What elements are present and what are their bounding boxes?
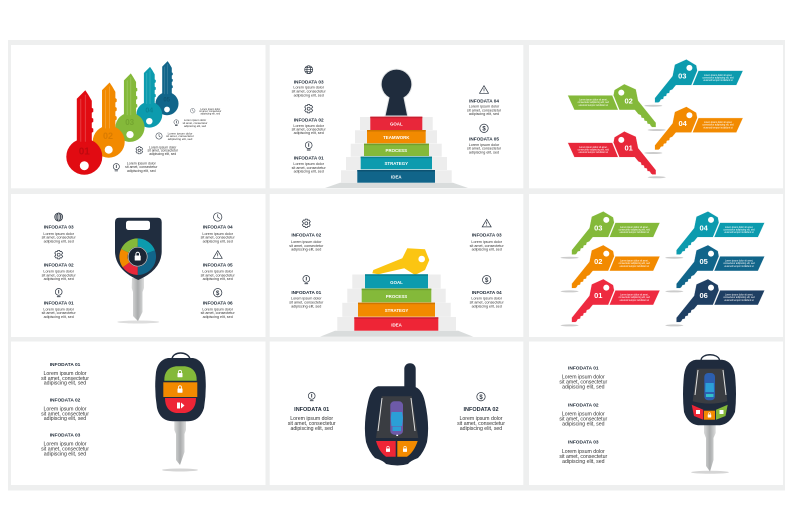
key tag 03	[561, 211, 660, 259]
key tag 01	[568, 131, 666, 178]
key shadow	[691, 471, 729, 474]
key slot	[126, 221, 150, 230]
key tag 03	[644, 59, 743, 107]
info 02: INFODATA 02	[463, 407, 499, 413]
key head	[115, 218, 162, 280]
fob shadow	[162, 468, 198, 472]
key tag 03: Lorem ipsum dolor sit amet,	[704, 74, 733, 77]
key tag 01: Lorem ipsum dolor sit amet,	[579, 146, 608, 149]
info 04: $	[485, 278, 489, 284]
info 03: adipiscing elit, sed	[44, 240, 74, 244]
step teamwork: TEAMWORK	[383, 135, 410, 140]
info 05: adipiscing elit, sed	[469, 150, 499, 154]
key tag 04: 04	[700, 223, 709, 232]
info 03: sit amet, consectetur	[292, 90, 326, 94]
info 05: INFODATA 05	[469, 136, 499, 141]
button orange	[704, 411, 715, 420]
button red	[376, 441, 396, 457]
info 03: INFODATA 03	[294, 79, 324, 84]
info 04: Lorem ipsum dolor	[471, 296, 503, 300]
key tag 03: consectetur adipiscing elit, sed	[702, 76, 734, 79]
step goal: GOAL	[390, 122, 403, 127]
panel: five colored keys	[11, 45, 266, 188]
info 02: sit amet, consectetur	[41, 411, 89, 417]
step goal	[370, 117, 422, 130]
fob blade	[174, 420, 186, 465]
info 05	[201, 251, 235, 281]
info 03: INFODATA 03	[472, 233, 502, 238]
key tag 04: 04	[679, 119, 688, 128]
info 05: $	[482, 126, 486, 132]
caption 04: sit amet, consectetur	[183, 121, 208, 125]
caption 04	[174, 118, 208, 128]
key tag 03: 03	[678, 72, 686, 81]
info 03: sit amet, consectetur	[41, 447, 89, 453]
info 02: sit amet, consectetur	[42, 274, 76, 278]
car	[704, 373, 715, 400]
key 02: 02	[103, 131, 113, 141]
info 03: adipiscing elit, sed	[562, 459, 605, 465]
key tag 05	[665, 245, 765, 292]
caption 02: sit amet, consectetur	[147, 149, 179, 153]
info 02: INFODATA 02	[568, 402, 599, 408]
key tag 05: eiusmod tempor incididunt ut	[724, 265, 754, 268]
info 02: Lorem ipsum dolor	[562, 412, 605, 418]
info 05: sit amet, consectetur	[201, 274, 235, 278]
info 02	[42, 250, 76, 281]
panel: three button fob	[11, 342, 266, 485]
info 04: sit amet, consectetur	[467, 108, 502, 112]
key shadow	[117, 320, 159, 324]
key tag 04: eiusmod tempor incididunt ut	[703, 126, 733, 129]
info 01: INFODATA 01	[291, 290, 322, 295]
info 04: adipiscing elit, sed	[472, 304, 502, 308]
info 02: Lorem ipsum dolor	[460, 416, 503, 422]
info 06: $	[216, 291, 220, 297]
info 01: adipiscing elit, sed	[291, 304, 321, 308]
key tag 02: Lorem ipsum dolor sit amet,	[620, 260, 649, 262]
key tag 02: 02	[625, 96, 633, 105]
caption 02: Lorem ipsum dolor	[149, 146, 177, 150]
fob body	[155, 358, 206, 421]
info 04	[470, 276, 504, 308]
info 04: INFODATA 04	[469, 98, 499, 103]
info 02: sit amet, consectetur	[559, 417, 607, 423]
key tag 04: Lorem ipsum dolor sit amet,	[725, 226, 754, 229]
info 06	[201, 288, 235, 319]
key tag 01	[561, 279, 660, 326]
info 02	[41, 397, 89, 422]
info 01: adipiscing elit, sed	[562, 385, 605, 391]
fob ring	[172, 353, 190, 359]
caption 03	[156, 131, 194, 141]
info 01: Lorem ipsum dolor	[44, 371, 87, 377]
info 01	[288, 392, 336, 432]
info 01: Lorem ipsum dolor	[562, 375, 605, 381]
info 03: adipiscing elit, sed	[294, 94, 324, 98]
key tag 04: consectetur adipiscing elit, sed	[702, 124, 734, 127]
caption 02: adipiscing elit, sed	[149, 152, 176, 156]
info 03	[42, 213, 76, 244]
info 02: INFODATA 02	[291, 233, 322, 238]
info 01: Lorem ipsum dolor	[290, 416, 333, 422]
info 01: adipiscing elit, sed	[294, 170, 324, 174]
info 03: Lorem ipsum dolor	[44, 442, 87, 448]
info 04: INFODATA 04	[472, 290, 502, 295]
info 01: adipiscing elit, sed	[291, 426, 333, 432]
key tag 01: consectetur adipiscing elit, sed	[578, 148, 610, 151]
info 06: INFODATA 06	[203, 300, 233, 305]
key tag 06: consectetur adipiscing elit, sed	[723, 296, 755, 299]
info 02: INFODATA 02	[50, 397, 81, 403]
info 04: adipiscing elit, sed	[203, 240, 233, 244]
step process	[362, 289, 431, 302]
info 01: adipiscing elit, sed	[44, 381, 86, 387]
floor	[325, 183, 468, 188]
info 03: Lorem ipsum dolor	[293, 86, 325, 90]
step goal	[365, 274, 428, 288]
info 06: sit amet, consectetur	[201, 311, 235, 315]
info 06: adipiscing elit, sed	[203, 315, 233, 319]
info 02: sit amet, consectetur	[292, 128, 326, 132]
caption 03: Lorem ipsum dolor	[168, 131, 192, 135]
key tag 06: eiusmod tempor incididunt ut	[724, 299, 754, 302]
key tag 02: eiusmod tempor incididunt ut	[579, 104, 608, 107]
info 02: adipiscing elit, sed	[562, 422, 605, 428]
step strategy: STRATEGY	[385, 308, 408, 313]
step idea: IDEA	[391, 174, 402, 179]
info 05: sit amet, consectetur	[467, 146, 502, 150]
info 02: Lorem ipsum dolor	[43, 270, 75, 274]
step process: PROCESS	[386, 294, 407, 299]
key tag 01: Lorem ipsum dolor sit amet,	[620, 294, 649, 296]
yellow key	[372, 248, 429, 275]
info 03	[41, 433, 89, 457]
caption 05: sit amet, consectetur	[199, 110, 222, 113]
info 05: Lorem ipsum dolor	[202, 270, 234, 274]
key ring	[701, 355, 720, 360]
info 04	[467, 86, 502, 116]
info 02: sit amet, consectetur	[289, 244, 324, 248]
button green	[716, 405, 728, 420]
side stairs	[337, 274, 456, 331]
info 03: adipiscing elit, sed	[472, 248, 502, 252]
info 02: $	[479, 395, 483, 401]
info 01	[289, 276, 324, 308]
keyhole	[381, 69, 412, 116]
info 02	[292, 104, 326, 135]
info 04: adipiscing elit, sed	[469, 112, 499, 116]
caption 03: sit amet, consectetur	[166, 134, 194, 138]
step idea	[357, 170, 435, 183]
caption 05: Lorem ipsum dolor	[200, 108, 220, 111]
info 04	[201, 213, 235, 244]
caption 01: adipiscing elit, sed	[127, 169, 156, 173]
antenna	[404, 363, 416, 393]
key tag 02: eiusmod tempor incididunt ut	[620, 265, 649, 268]
panel: six tag keys	[529, 194, 783, 337]
info 01: sit amet, consectetur	[288, 421, 336, 427]
info 01: INFODATA 01	[44, 300, 74, 305]
info 01: Lorem ipsum dolor	[291, 296, 322, 300]
button orange	[397, 441, 418, 457]
info 02: Lorem ipsum dolor	[293, 124, 325, 128]
info 02: INFODATA 02	[44, 262, 74, 267]
info 01: sit amet, consectetur	[292, 166, 326, 170]
info 06: Lorem ipsum dolor	[202, 308, 234, 312]
key 01	[66, 90, 102, 175]
caption 05: adipiscing elit, sed	[201, 112, 221, 115]
key tag 04: eiusmod tempor incididunt ut	[724, 231, 754, 234]
info 01	[42, 288, 76, 319]
step idea	[354, 317, 438, 331]
info 02: Lorem ipsum dolor	[291, 240, 322, 244]
caption 03: adipiscing elit, sed	[168, 137, 193, 141]
key tag 02: consectetur adipiscing elit, sed	[619, 262, 651, 265]
info 02	[289, 219, 324, 252]
key 03	[115, 73, 145, 142]
info 03: sit amet, consectetur	[470, 244, 504, 248]
remote body	[683, 360, 736, 425]
key 04	[136, 67, 162, 128]
info 01: INFODATA 01	[294, 155, 324, 160]
panel: key fob with color wheel	[11, 194, 266, 337]
info 04: Lorem ipsum dolor	[202, 232, 234, 236]
info 02: INFODATA 02	[294, 117, 324, 122]
info 02	[457, 392, 505, 432]
key 05	[155, 61, 179, 115]
remote body	[365, 386, 428, 466]
panel: yellow key on stairs	[270, 194, 523, 337]
info 03: INFODATA 03	[50, 433, 81, 439]
info 04: Lorem ipsum dolor	[469, 104, 500, 108]
caption 01: sit amet, consectetur	[125, 165, 158, 169]
info 01: INFODATA 01	[50, 362, 81, 368]
floor	[320, 331, 473, 337]
key tag 01: eiusmod tempor incididunt ut	[620, 299, 649, 302]
caption 04: adipiscing elit, sed	[184, 124, 206, 128]
info 02: adipiscing elit, sed	[291, 248, 321, 252]
caption 01	[113, 161, 158, 173]
info 02: adipiscing elit, sed	[460, 426, 502, 432]
info 03	[292, 66, 326, 98]
info 01: sit amet, consectetur	[42, 311, 76, 315]
key tag 03: consectetur adipiscing elit, sed	[619, 228, 651, 231]
key blade	[704, 424, 716, 472]
step strategy	[361, 157, 432, 169]
info 03: sit amet, consectetur	[559, 454, 607, 460]
info 01	[292, 142, 326, 174]
key tag 03: eiusmod tempor incididunt ut	[620, 231, 649, 234]
step process	[364, 144, 429, 156]
info 01: Lorem ipsum dolor	[43, 308, 75, 312]
info 03: Lorem ipsum dolor	[562, 449, 605, 455]
info 01	[41, 362, 89, 387]
info 01: sit amet, consectetur	[41, 376, 89, 382]
key tag 02: 02	[594, 257, 602, 266]
info 05: Lorem ipsum dolor	[469, 143, 500, 147]
caption 01: Lorem ipsum dolor	[127, 161, 157, 165]
key 01: 01	[79, 146, 90, 157]
key tag 01: eiusmod tempor incididunt ut	[579, 151, 608, 154]
key tag 05: 05	[700, 257, 708, 266]
info 01: INFODATA 01	[568, 365, 599, 371]
key tag 03: Lorem ipsum dolor sit amet,	[620, 226, 649, 229]
info 02: sit amet, consectetur	[457, 421, 505, 427]
key tag 05: Lorem ipsum dolor sit amet,	[725, 260, 754, 262]
info 01: Lorem ipsum dolor	[293, 162, 325, 166]
step strategy: STRATEGY	[385, 161, 408, 166]
info 01: sit amet, consectetur	[559, 380, 607, 386]
info 02: adipiscing elit, sed	[44, 277, 74, 281]
step strategy	[358, 303, 435, 317]
info 04: INFODATA 04	[203, 224, 233, 229]
button green	[164, 366, 197, 381]
step process: PROCESS	[386, 148, 407, 153]
info 02	[559, 402, 607, 428]
info 03: Lorem ipsum dolor	[43, 232, 75, 236]
info 02: adipiscing elit, sed	[44, 416, 86, 422]
key tag 03: 03	[594, 223, 602, 232]
key tag 05: consectetur adipiscing elit, sed	[723, 262, 755, 265]
key tag 02	[561, 245, 660, 292]
info 04: sit amet, consectetur	[201, 236, 235, 240]
key tag 06: Lorem ipsum dolor sit amet,	[725, 294, 754, 296]
step teamwork	[367, 130, 426, 143]
button red	[692, 405, 703, 420]
key tag 06	[665, 279, 765, 326]
panel: key remote with car	[529, 342, 783, 485]
key blade	[132, 278, 144, 321]
key 05: 05	[163, 98, 171, 104]
info 03: INFODATA 03	[44, 224, 74, 229]
button red	[165, 398, 196, 413]
road screen	[376, 396, 418, 438]
key tag 01: consectetur adipiscing elit, sed	[619, 296, 651, 299]
button orange	[163, 382, 197, 397]
key tag 03: eiusmod tempor incididunt ut	[703, 79, 733, 82]
caption 02	[136, 146, 179, 156]
info 01: INFODATA 01	[294, 407, 329, 413]
key tag 01: 01	[594, 291, 602, 300]
panel: keyhole on stairs	[270, 45, 523, 188]
info 01	[559, 365, 607, 391]
key tag 04	[665, 211, 765, 259]
info 04: sit amet, consectetur	[470, 300, 504, 304]
info 02: Lorem ipsum dolor	[44, 406, 87, 412]
key tag 06: 06	[700, 291, 708, 300]
key tag 01: 01	[625, 144, 633, 153]
color wheel	[119, 238, 156, 275]
key 02	[93, 83, 125, 158]
info 03	[559, 439, 607, 465]
car	[390, 401, 403, 435]
info 03: Lorem ipsum dolor	[471, 240, 503, 244]
info 05	[467, 124, 502, 154]
key tag 02	[568, 84, 666, 131]
info 01: adipiscing elit, sed	[44, 315, 74, 319]
road screen	[693, 369, 727, 404]
key tag 02: Lorem ipsum dolor sit amet,	[579, 98, 608, 102]
key tag 02: consectetur adipiscing elit, sed	[578, 101, 610, 104]
key tag 04: Lorem ipsum dolor sit amet,	[704, 121, 733, 124]
side stairs	[341, 117, 452, 183]
key 04: 04	[145, 108, 153, 114]
step idea: IDEA	[391, 322, 403, 328]
info 03: sit amet, consectetur	[42, 236, 76, 240]
caption 04: Lorem ipsum dolor	[184, 118, 206, 122]
key tag 04	[644, 107, 743, 154]
info 05: adipiscing elit, sed	[203, 277, 233, 281]
info 02: adipiscing elit, sed	[294, 131, 324, 135]
step goal: GOAL	[390, 280, 403, 285]
caption 05	[190, 108, 222, 115]
info 01: sit amet, consectetur	[289, 300, 324, 304]
key tag 04: consectetur adipiscing elit, sed	[723, 228, 755, 231]
info 03	[470, 219, 504, 252]
info 03: adipiscing elit, sed	[44, 451, 86, 457]
panel: alarm remote with antenna	[270, 342, 523, 485]
panel: four tag keys	[529, 45, 783, 188]
info 05: INFODATA 05	[203, 262, 233, 267]
info 03: INFODATA 03	[568, 439, 599, 445]
key 03: 03	[125, 118, 135, 127]
